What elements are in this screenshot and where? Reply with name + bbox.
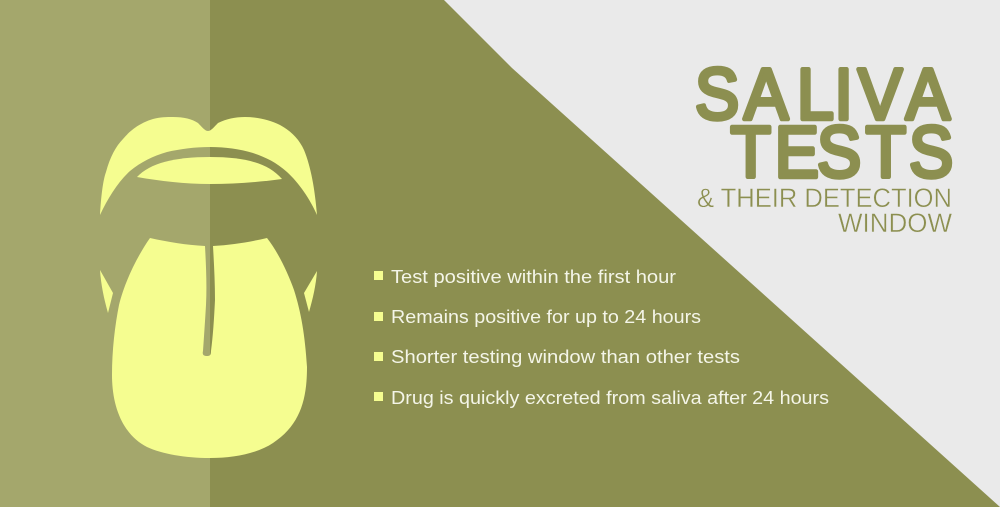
- title: TESTS: TESTS: [731, 111, 953, 193]
- tongue with centre groove: [112, 238, 307, 458]
- left lower lip fragment: [100, 270, 113, 313]
- bullet list: [374, 267, 829, 408]
- bullet 4: Drug is quickly excreted from saliva after 24 hours: [391, 388, 829, 408]
- subtitle: & THEIR DETECTION: & THEIR DETECTION: [697, 183, 952, 213]
- right lower lip fragment: [304, 271, 317, 312]
- bullet 2: Remains positive for up to 24 hours: [391, 307, 701, 327]
- icon: mouth with tongue: [100, 117, 317, 458]
- lower edge of upper lip: [137, 157, 282, 184]
- panel: lighter left band: [0, 0, 210, 507]
- title: SALIVA: SALIVA: [695, 53, 950, 135]
- bullet 3: Shorter testing window than other tests: [391, 347, 740, 367]
- upper lip: [100, 117, 317, 215]
- bullet 1: Test positive within the first hour: [391, 267, 676, 287]
- subtitle: WINDOW: WINDOW: [838, 208, 952, 238]
